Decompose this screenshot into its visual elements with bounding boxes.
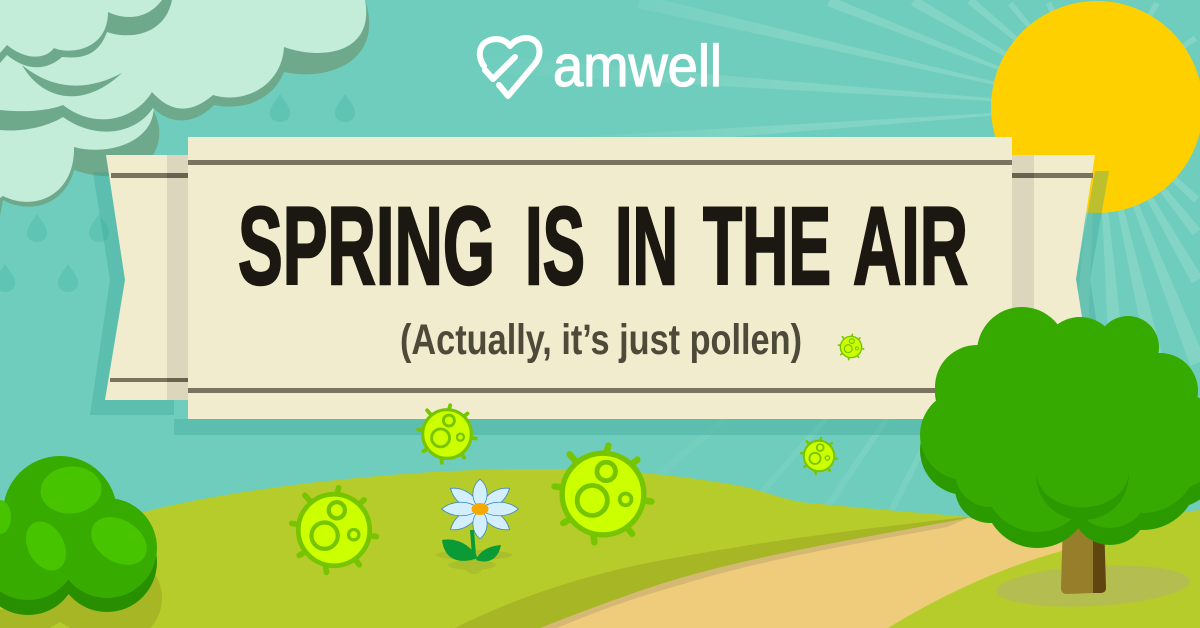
logo heart icon bbox=[480, 38, 539, 96]
title: THE bbox=[703, 185, 831, 308]
subtitle: (Actually, it’s just pollen) bbox=[400, 316, 802, 364]
flower leaves bbox=[442, 539, 501, 561]
flower petals bbox=[442, 479, 518, 539]
bush bbox=[0, 456, 162, 628]
sand path bbox=[540, 518, 1100, 628]
pollen: top bbox=[418, 405, 476, 463]
title: IN bbox=[615, 185, 678, 308]
tree canopy bbox=[920, 307, 1200, 532]
tree canopy crescent bbox=[1036, 472, 1129, 520]
amwell logo bbox=[480, 34, 722, 99]
tree shadow bbox=[995, 561, 1191, 611]
right hill bbox=[888, 510, 1200, 628]
sun bbox=[991, 1, 1200, 213]
flower shadow bbox=[436, 550, 512, 574]
tree canopy shadow bbox=[920, 352, 1200, 548]
pollen: large bbox=[555, 446, 651, 542]
pollen: left bbox=[292, 488, 376, 572]
title: SPRING bbox=[238, 185, 495, 308]
logo wordmark: amwell bbox=[553, 34, 722, 99]
flower centre bbox=[472, 503, 488, 515]
storm cloud bbox=[0, 0, 369, 216]
flower stem bbox=[470, 530, 476, 556]
tree trunk bbox=[1061, 520, 1106, 594]
main hill bbox=[0, 469, 1000, 628]
tree bbox=[920, 307, 1200, 611]
ribbon banner bbox=[90, 137, 1112, 435]
sun rays bbox=[458, 0, 1200, 608]
bush shadow bbox=[0, 553, 162, 628]
hill shadow by path bbox=[455, 517, 968, 628]
title bbox=[238, 185, 968, 308]
bush highlights bbox=[0, 464, 156, 577]
pollen: right bbox=[801, 438, 837, 474]
pollen: tiny bbox=[838, 334, 864, 360]
title: AIR bbox=[853, 185, 968, 308]
raindrops bbox=[0, 94, 355, 292]
title: IS bbox=[525, 185, 585, 308]
flower bbox=[436, 479, 518, 574]
